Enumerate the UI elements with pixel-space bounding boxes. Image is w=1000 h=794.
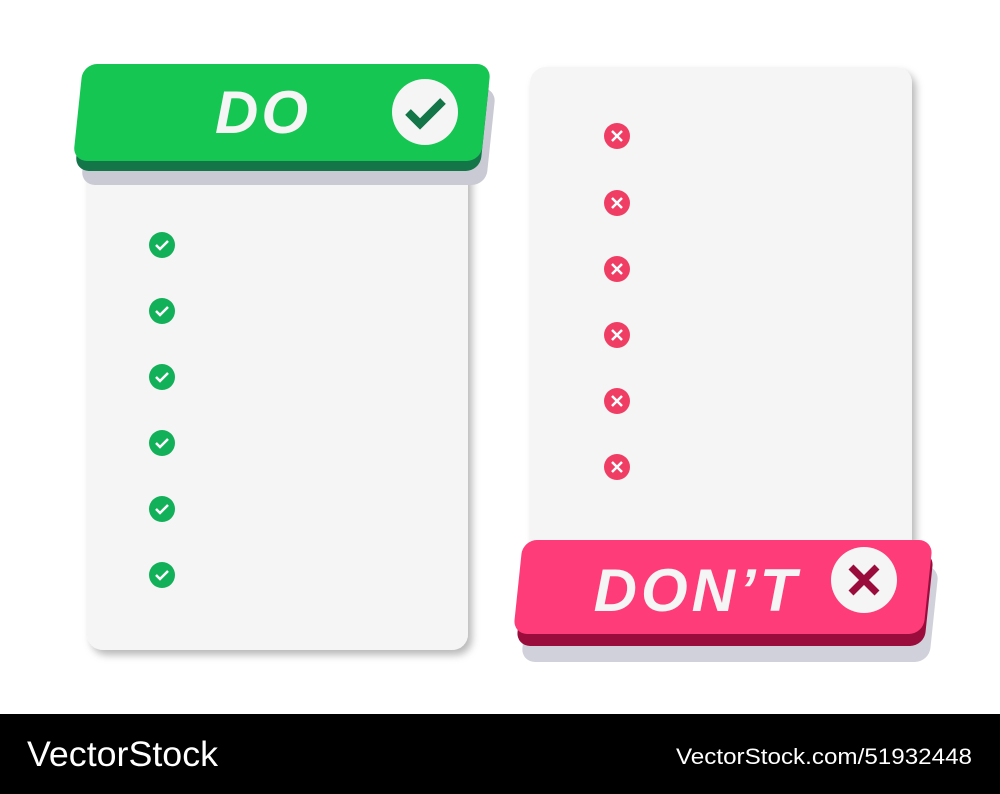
footer bar: VectorStock: [27, 735, 219, 774]
footer bar: [0, 714, 1000, 794]
dont banner: [513, 540, 939, 662]
do banner: [73, 64, 496, 185]
panel: dont card: [513, 67, 939, 662]
do banner: DO: [215, 79, 311, 146]
dont banner: DON’T: [594, 557, 801, 624]
cross list: [604, 123, 630, 480]
check list: [149, 232, 175, 588]
footer bar: VectorStock.com/51932448: [676, 744, 972, 769]
panel: do card: [73, 64, 496, 650]
